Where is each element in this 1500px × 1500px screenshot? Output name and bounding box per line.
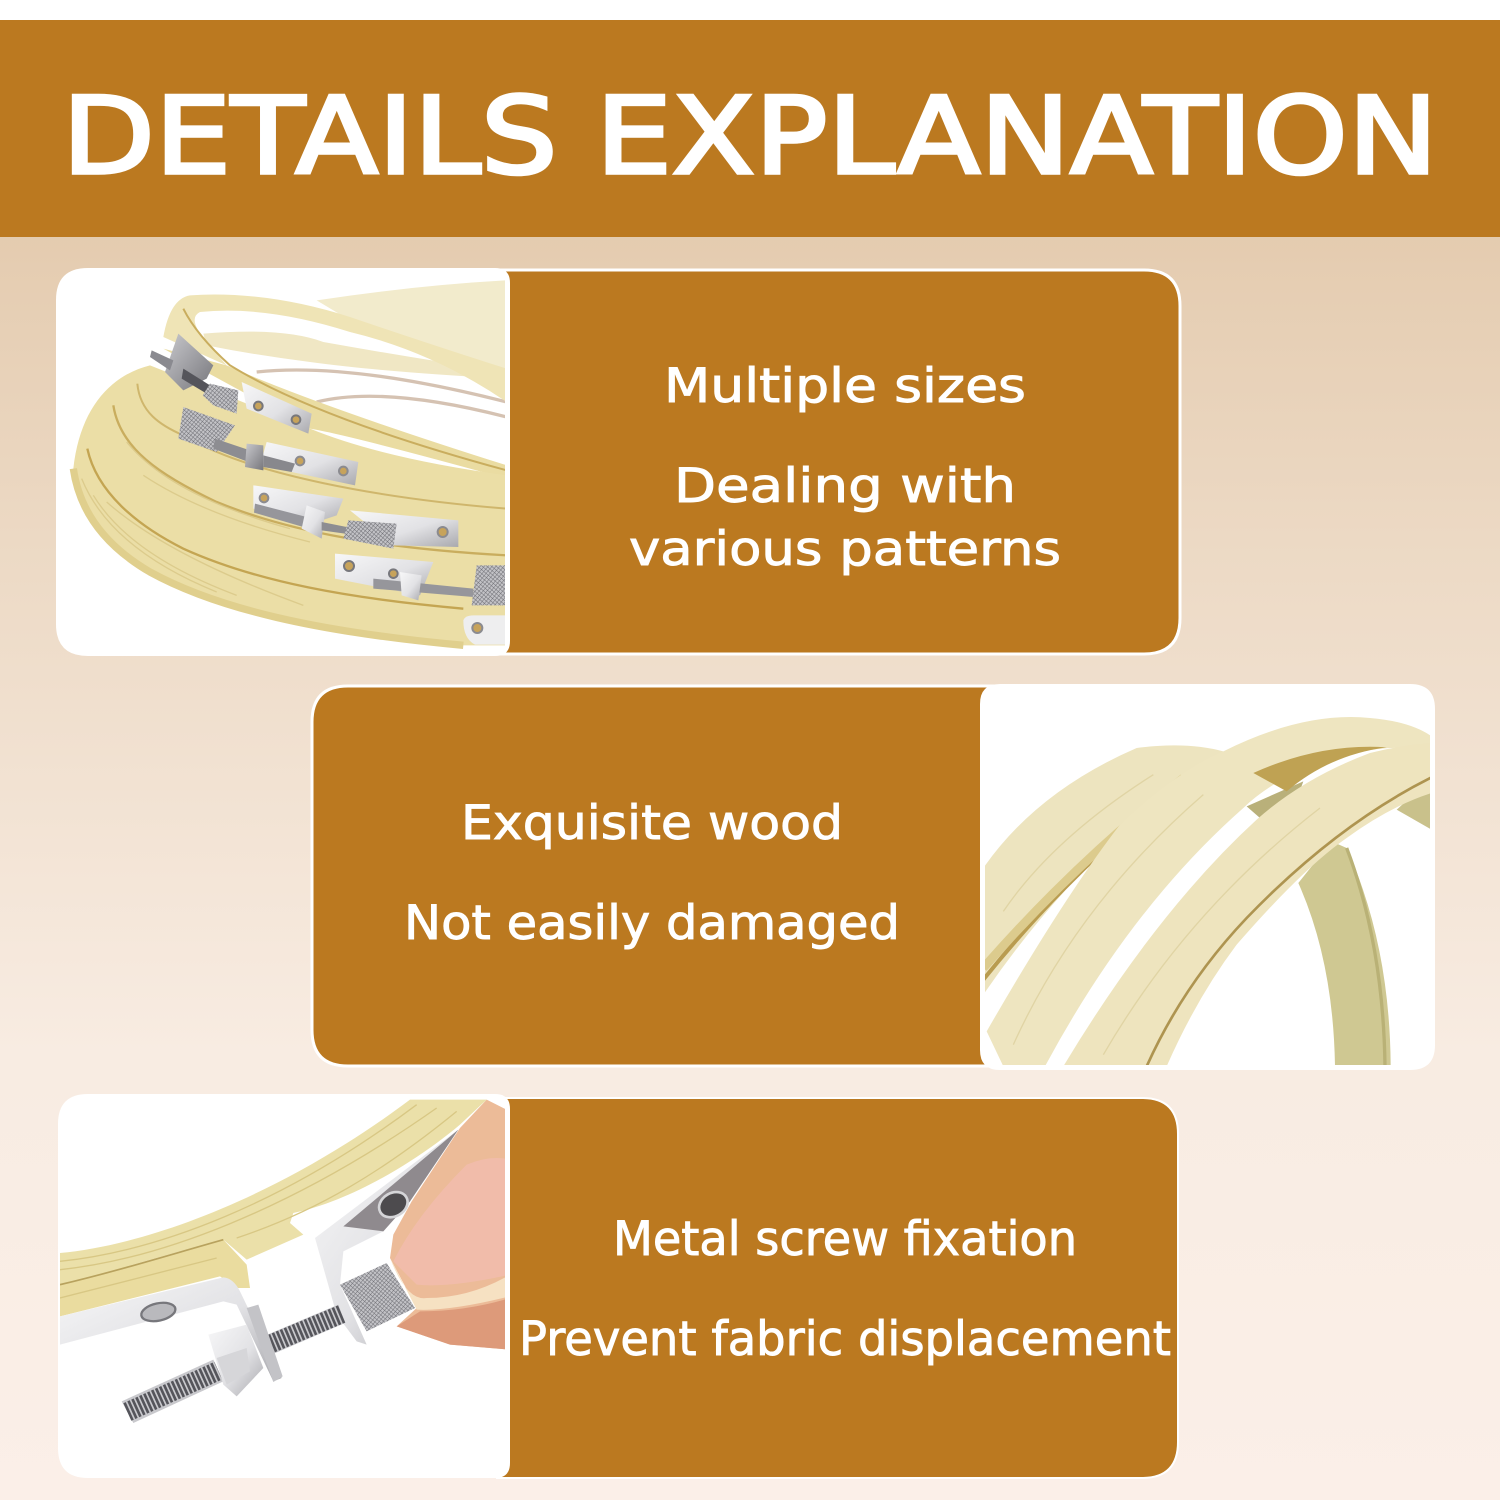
title banner [0,20,1500,237]
text card: multiple sizes: various patterns [629,522,1061,577]
text card: exquisite wood: Exquisite wood [461,796,843,851]
panel: multiple sizes [56,268,1180,656]
text card: multiple sizes [497,270,1180,654]
text card: multiple sizes: Multiple sizes [664,359,1026,414]
text card: metal screw: Metal screw fixation [613,1212,1077,1267]
text card: multiple sizes: Dealing with [674,459,1016,514]
photo: fingers tightening metal screw [58,1094,510,1478]
panel: metal screw fixation [58,1094,1178,1478]
title: DETAILS EXPLANATION [62,75,1438,198]
text card: metal screw [497,1098,1178,1478]
bracket 2 [178,407,358,485]
text card: exquisite wood: Not easily damaged [404,896,900,951]
photo: bamboo hoop close-up [980,684,1435,1070]
photo: stacked bamboo hoops with screws [56,268,510,656]
bracket 3 [253,485,458,549]
bracket 1 [150,334,312,434]
text card: metal screw: Prevent fabric displacement [519,1312,1171,1367]
bracket 4 [335,554,507,645]
panel: exquisite wood [312,684,1435,1070]
text card: exquisite wood [312,686,993,1066]
